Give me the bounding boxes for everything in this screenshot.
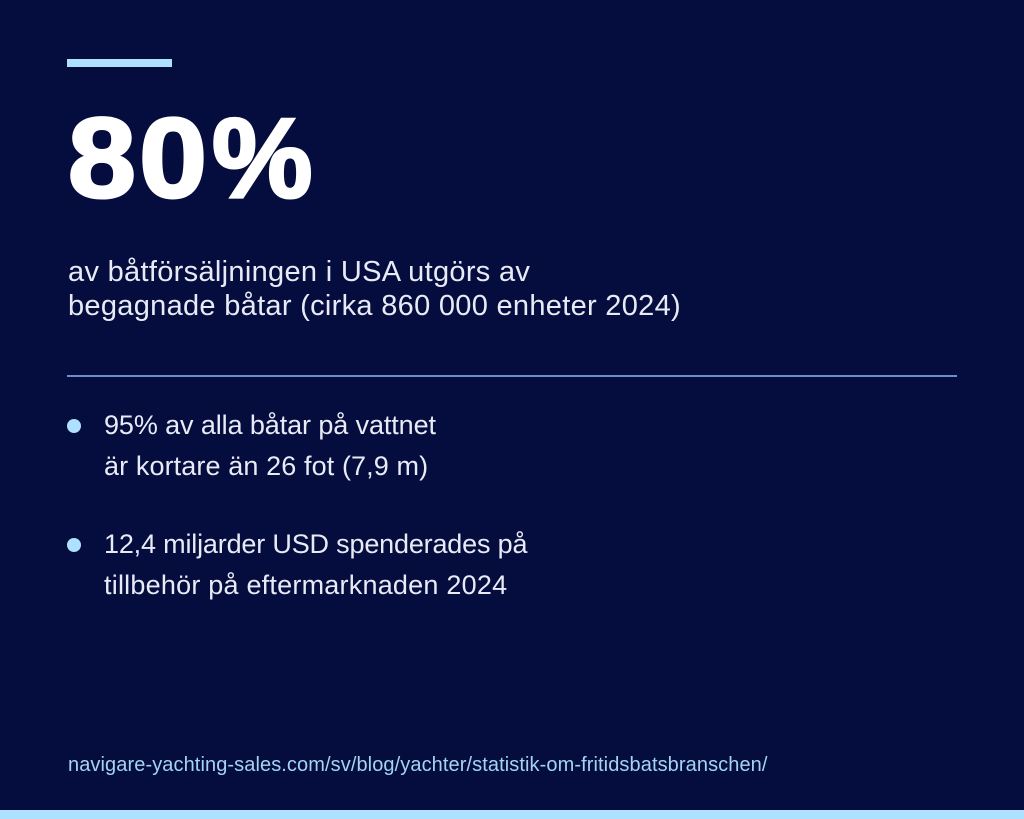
bullet dot 1 (67, 419, 81, 433)
bullet text 1: är kortare än 26 fot (7,9 m) (104, 451, 428, 481)
source URL: navigare-yachting-sales.com/sv/blog/yachter/statistik-om-fritidsbatsbranschen/ (68, 754, 768, 776)
bullet item 2 (67, 529, 528, 600)
bullet text 1 (104, 410, 436, 481)
bullet text 2: tillbehör på eftermarknaden 2024 (104, 570, 507, 600)
subheading text: av båtförsäljningen i USA utgörs av (68, 256, 530, 288)
subheading text: begagnade båtar (cirka 860 000 enheter 2024) (68, 290, 681, 322)
bullet dot 2 (67, 538, 81, 552)
bullet text 1: 95% av alla båtar på vattnet (104, 410, 436, 440)
bullet text 2: 12,4 miljarder USD spenderades på (104, 529, 527, 559)
headline stat: 80% (68, 95, 312, 221)
bottom band (0, 810, 1024, 819)
divider (67, 375, 957, 377)
bullet text 2 (104, 529, 528, 600)
accent bar (67, 59, 172, 67)
headline stat: 80%: % (212, 95, 312, 221)
headline stat: 80%: 80 (68, 95, 210, 221)
subheading text (68, 256, 681, 322)
bullet item 1 (67, 410, 436, 481)
